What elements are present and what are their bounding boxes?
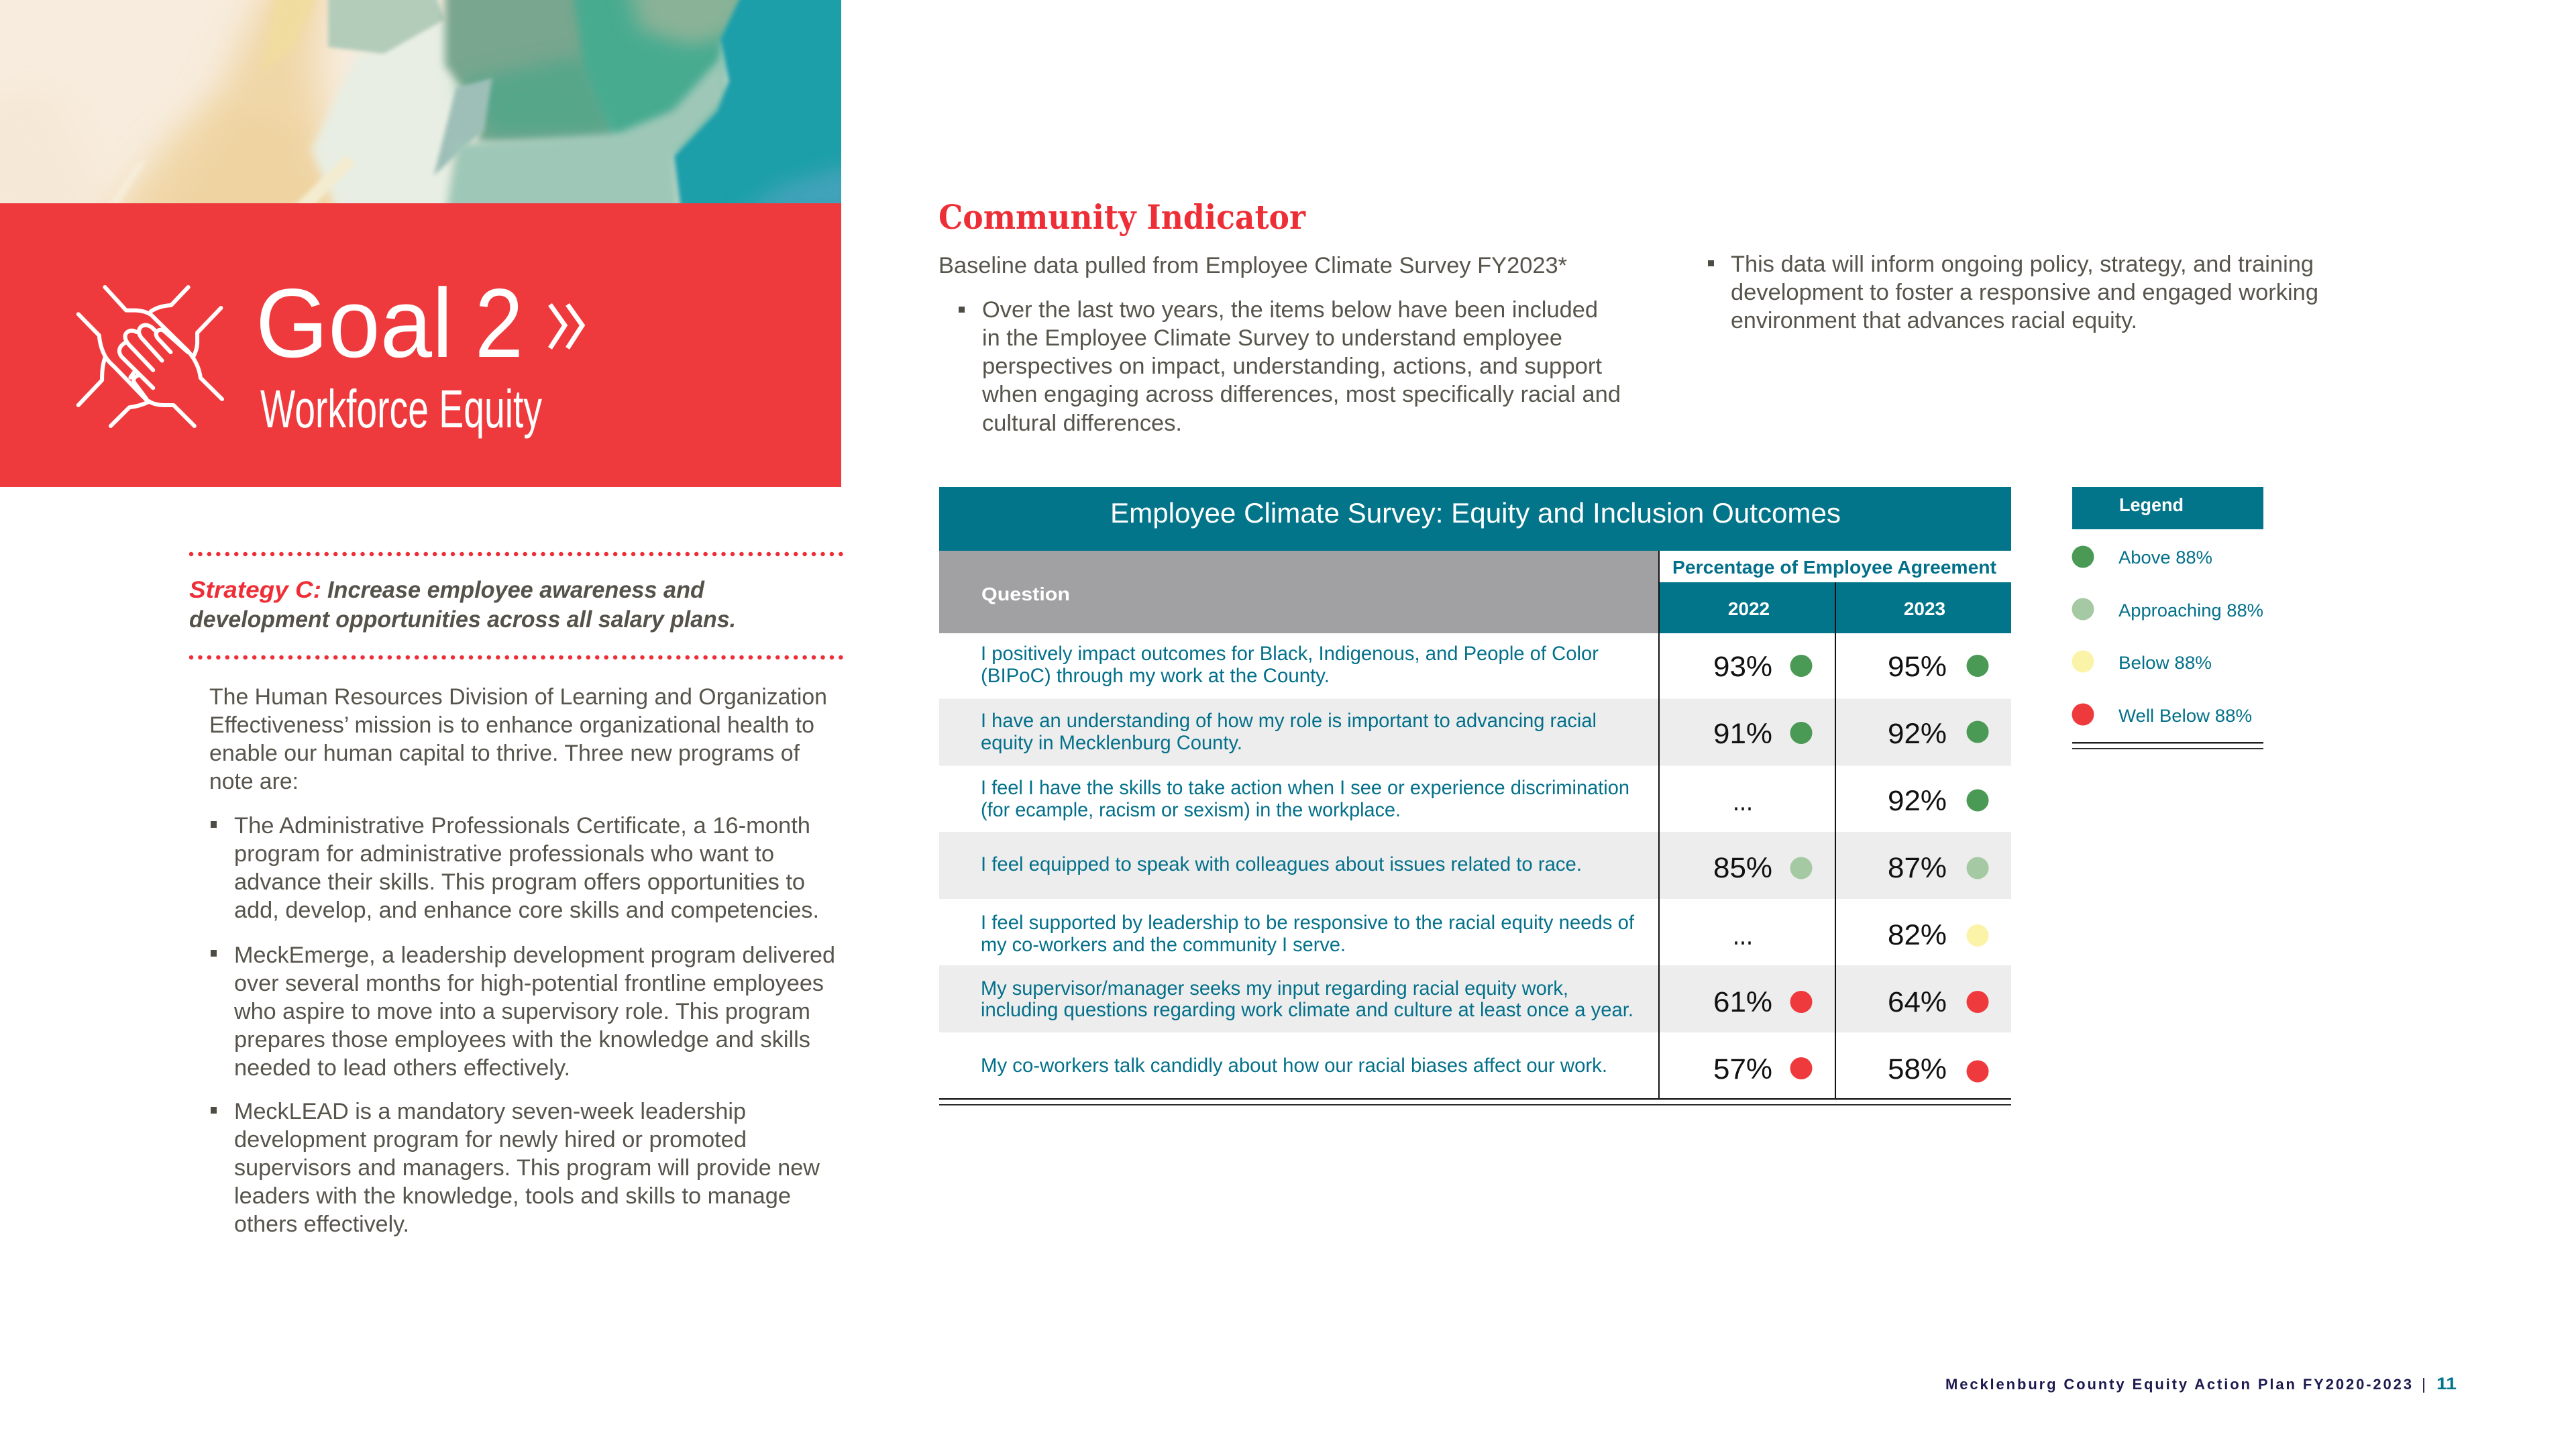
legend: above xyxy=(2072,546,2212,568)
legend: approaching xyxy=(2072,598,2263,621)
row 1: 93% xyxy=(1713,651,1772,683)
icon: chevrons xyxy=(550,305,582,348)
bullet: Administrative Professionals Certificate: advance their skills. This program offers opportunities to xyxy=(234,869,805,895)
footer: 11 xyxy=(2436,1375,2457,1393)
left body intro: enable our human capital to thrive. Three new programs of xyxy=(209,741,800,766)
row 3: (for ecample, racism or sexism) in the workplace. xyxy=(981,799,1401,821)
community indicator left text: Over the last two years, the items below have been included xyxy=(982,297,1598,323)
row 1: 95% xyxy=(1888,651,1947,683)
legend: approaching: Approaching 88% xyxy=(2118,600,2263,621)
row 3: I feel I have the skills to take action when I see or experience discrimination xyxy=(981,777,1629,799)
bullet: Administrative Professionals Certificate: The Administrative Professionals Certificate, a 16-month xyxy=(234,813,810,839)
header watercolor image xyxy=(0,0,857,221)
heading: Community Indicator: Community Indicator xyxy=(938,197,1306,237)
row 2: 91% xyxy=(1713,718,1772,750)
strategy callout: Strategy C: xyxy=(189,577,321,603)
legend: well below: Well Below 88% xyxy=(2118,706,2252,726)
row backgrounds xyxy=(939,699,2011,1032)
bullet: MeckLEAD: others effectively. xyxy=(234,1212,409,1237)
left body intro: Effectiveness’ mission is to enhance organizational health to xyxy=(209,712,814,738)
row 6 xyxy=(981,977,1988,1021)
row 5: my co-workers and the community I serve. xyxy=(981,934,1346,956)
row 5 xyxy=(981,912,1988,956)
bullet: MeckLEAD: development program for newly hired or promoted xyxy=(234,1127,747,1152)
row 4: I feel equipped to speak with colleagues about issues related to race. xyxy=(981,853,1582,875)
bullet: MeckEmerge: over several months for high-potential frontline employees xyxy=(234,971,824,996)
bullet: MeckLEAD: MeckLEAD is a mandatory seven-week leadership xyxy=(234,1099,746,1124)
row 1 xyxy=(981,643,1988,687)
footer: | xyxy=(2422,1375,2426,1393)
row 6: My supervisor/manager seeks my input regarding racial equity work, xyxy=(981,977,1568,1000)
community indicator left text xyxy=(938,253,1621,436)
goal title: Goal xyxy=(256,268,453,378)
goal subtitle: Workforce Equity xyxy=(260,379,542,439)
table header: question: Question xyxy=(981,584,1070,604)
left body intro: note are: xyxy=(209,769,299,794)
row 3: ... xyxy=(1733,785,1753,817)
row 7: My co-workers talk candidly about how our racial biases affect our work. xyxy=(981,1055,1607,1077)
row 3 xyxy=(981,777,1988,821)
row 2: 92% xyxy=(1888,718,1947,750)
bullet: MeckEmerge xyxy=(211,943,835,1081)
community indicator right text: development to foster a responsive and engaged working xyxy=(1731,280,2318,305)
row 6: 61% xyxy=(1713,986,1772,1018)
column rules xyxy=(1659,551,1835,1098)
left body intro: The Human Resources Division of Learning and Organization xyxy=(209,684,827,710)
table header: percentage: 2023 xyxy=(1904,598,1945,619)
legend: above: Above 88% xyxy=(2118,547,2212,568)
row 2: I have an understanding of how my role is important to advancing racial xyxy=(981,710,1597,732)
row 5: 82% xyxy=(1888,919,1947,951)
bullet: MeckEmerge: who aspire to move into a supervisory role. This program xyxy=(233,999,810,1024)
row 7: 58% xyxy=(1888,1053,1947,1085)
legend: below: Below 88% xyxy=(2118,653,2212,673)
row 5: ... xyxy=(1733,919,1753,951)
community indicator right text: environment that advances racial equity. xyxy=(1731,308,2137,333)
bullet: MeckEmerge: prepares those employees with the knowledge and skills xyxy=(234,1027,810,1053)
goal title: 2 xyxy=(475,268,523,378)
legend header: Legend xyxy=(2119,494,2184,515)
table header: percentage xyxy=(1659,557,2011,633)
table title band xyxy=(939,487,2011,551)
row 4: 85% xyxy=(1713,852,1772,884)
bullet: MeckLEAD xyxy=(211,1099,820,1237)
bullet: Administrative Professionals Certificate xyxy=(211,813,819,923)
strategy callout: Increase employee awareness and xyxy=(327,577,705,603)
footer: Mecklenburg County Equity Action Plan FY2020-2023 xyxy=(1945,1376,2412,1393)
community indicator right text xyxy=(1708,252,2318,333)
row 6: 64% xyxy=(1888,986,1947,1018)
row 4: 87% xyxy=(1888,852,1947,884)
legend header xyxy=(2072,487,2263,529)
table header: percentage: Percentage of Employee Agreement xyxy=(1672,557,1996,578)
community indicator right text: This data will inform ongoing policy, strategy, and training xyxy=(1731,252,2314,277)
legend: well below xyxy=(2072,703,2252,726)
row 1: I positively impact outcomes for Black, Indigenous, and People of Color xyxy=(981,643,1599,665)
bullet: MeckLEAD: supervisors and managers. This program will provide new xyxy=(234,1155,820,1181)
row 1: (BIPoC) through my work at the County. xyxy=(981,665,1330,687)
row 2: equity in Mecklenburg County. xyxy=(981,732,1242,754)
table title band: Employee Climate Survey: Equity and Inclusion Outcomes xyxy=(1110,497,1841,529)
row 4 xyxy=(981,852,1988,884)
community indicator left text: perspectives on impact, understanding, actions, and support xyxy=(982,354,1603,379)
strategy callout xyxy=(189,554,844,657)
community indicator left text: Baseline data pulled from Employee Climate Survey FY2023* xyxy=(938,253,1567,278)
legend: below xyxy=(2072,651,2212,673)
row 6: including questions regarding work climate and culture at least once a year. xyxy=(981,999,1633,1021)
row 3: 92% xyxy=(1888,785,1947,817)
community indicator left text: cultural differences. xyxy=(982,411,1182,436)
bullet: Administrative Professionals Certificate: add, develop, and enhance core skills and competencies. xyxy=(234,898,819,923)
row 5: I feel supported by leadership to be responsive to the racial equity needs of xyxy=(981,912,1635,934)
table header: percentage: 2022 xyxy=(1728,598,1770,619)
table header: question xyxy=(939,551,1659,633)
strategy callout: development opportunities across all salary plans. xyxy=(189,606,736,633)
goal banner xyxy=(0,203,841,487)
bullet: MeckLEAD: leaders with the knowledge, tools and skills to manage xyxy=(234,1183,791,1209)
left body intro xyxy=(209,684,827,794)
bullet: MeckEmerge: needed to lead others effectively. xyxy=(234,1055,570,1081)
bullet: MeckEmerge: MeckEmerge, a leadership development program delivered xyxy=(234,943,835,968)
community indicator left text: in the Employee Climate Survey to understand employee xyxy=(982,325,1562,351)
bullet: Administrative Professionals Certificate: program for administrative professionals who want to xyxy=(234,841,774,867)
icon: joined hands xyxy=(78,287,222,426)
community indicator left text: when engaging across differences, most specifically racial and xyxy=(981,382,1621,407)
row 2 xyxy=(981,710,1988,754)
survey table xyxy=(939,487,2011,1106)
row 7: 57% xyxy=(1713,1053,1772,1085)
legend xyxy=(2072,487,2263,749)
row 7 xyxy=(981,1053,1988,1085)
